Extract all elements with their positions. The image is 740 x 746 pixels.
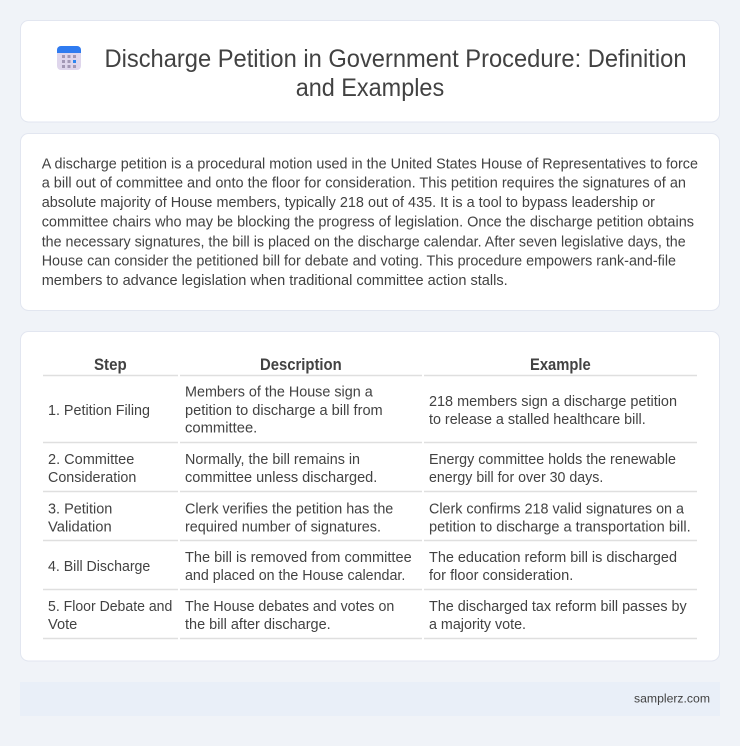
table row 2: committee consideration: 2. Committee: [48, 452, 134, 468]
table row 5: floor debate and vote: Vote: [48, 617, 77, 633]
table row 3: petition validation: Clerk verifies the petition has the: [185, 501, 393, 517]
table row 1: petition filing: Members of the House sign a: [185, 385, 374, 401]
title: Discharge Petition in Government Procedure: Definition: [104, 45, 686, 73]
table row 5: floor debate and vote: The House debates and votes on: [185, 599, 394, 615]
table header: example: Example: [530, 356, 591, 374]
panel: page header: [20, 20, 720, 122]
table row 5: floor debate and vote: The discharged tax reform bill passes by: [429, 599, 687, 615]
table row 2: committee consideration: committee unless discharged.: [185, 470, 377, 486]
table row 5: floor debate and vote: 5. Floor Debate and: [48, 599, 172, 615]
table row 4: bill discharge: and placed on the House calendar.: [185, 568, 405, 584]
table row 3: petition validation: required number of signatures.: [185, 519, 381, 535]
footer bar: [20, 682, 720, 716]
text block: definition paragraph: committee chairs who may be blocking the progress of legislation. Once the discharge petition obtains: [42, 214, 694, 230]
table row 4: bill discharge: for floor consideration.: [429, 568, 573, 584]
text block: definition paragraph: members to advance legislation when traditional committee action stalls.: [42, 273, 508, 289]
panel: procedure table: [20, 332, 720, 661]
panel: introduction: [20, 134, 720, 310]
table row 2: committee consideration: Energy committee holds the renewable: [429, 452, 676, 468]
table row 1: petition filing: committee.: [185, 421, 257, 437]
table row 1: petition filing: petition to discharge a bill from: [185, 403, 383, 419]
table row 5: floor debate and vote: the bill after discharge.: [185, 617, 331, 633]
table row 3: petition validation: petition to discharge a transportation bill.: [429, 519, 691, 535]
table row 2: committee consideration: Consideration: [48, 470, 136, 486]
table row 3: petition validation: Validation: [48, 519, 112, 535]
table row 1: petition filing: 1. Petition Filing: [48, 403, 150, 419]
text block: definition paragraph: House can consider the petitioned bill for debate and voting. This procedure empowers rank-and-file: [42, 254, 676, 270]
text block: definition paragraph: A discharge petition is a procedural motion used in the United States House of Representatives to force: [42, 156, 698, 172]
table row 5: floor debate and vote: a majority vote.: [429, 617, 526, 633]
text block: definition paragraph: absolute majority of House members, typically 218 out of 435. It is a tool to bypass leadership or: [42, 195, 655, 211]
table row 1: petition filing: to release a stalled healthcare bill.: [429, 412, 646, 428]
table row 2: committee consideration: [48, 452, 676, 486]
text block: definition paragraph: [42, 156, 698, 289]
table row 4: bill discharge: The education reform bill is discharged: [429, 550, 677, 566]
table header: step: Step: [94, 356, 127, 374]
table row 4: bill discharge: 4. Bill Discharge: [48, 559, 150, 575]
table row 3: petition validation: [48, 501, 691, 535]
table header: description: Description: [260, 356, 342, 374]
footer source text: samplerz.com: [634, 692, 710, 706]
text block: definition paragraph: the necessary signatures, the bill is placed on the discharge calendar. After seven legislative days, the: [42, 234, 686, 250]
text block: definition paragraph: a bill out of committee and onto the floor for consideration. This petition requires the signatures of an: [42, 176, 686, 192]
table row 5: floor debate and vote: [48, 599, 687, 633]
table row 4: bill discharge: The bill is removed from committee: [185, 550, 412, 566]
table row 3: petition validation: 3. Petition: [48, 501, 112, 517]
icon: calendar: [57, 46, 81, 70]
table row 3: petition validation: Clerk confirms 218 valid signatures on a: [429, 501, 685, 517]
title: [104, 45, 686, 102]
table row 2: committee consideration: Normally, the bill remains in: [185, 452, 360, 468]
table row 4: bill discharge: [48, 550, 677, 584]
table row 2: committee consideration: energy bill for over 30 days.: [429, 470, 603, 486]
table row 1: petition filing: 218 members sign a discharge petition: [429, 394, 677, 410]
table row 1: petition filing: [48, 385, 677, 437]
title: and Examples: [296, 74, 444, 102]
